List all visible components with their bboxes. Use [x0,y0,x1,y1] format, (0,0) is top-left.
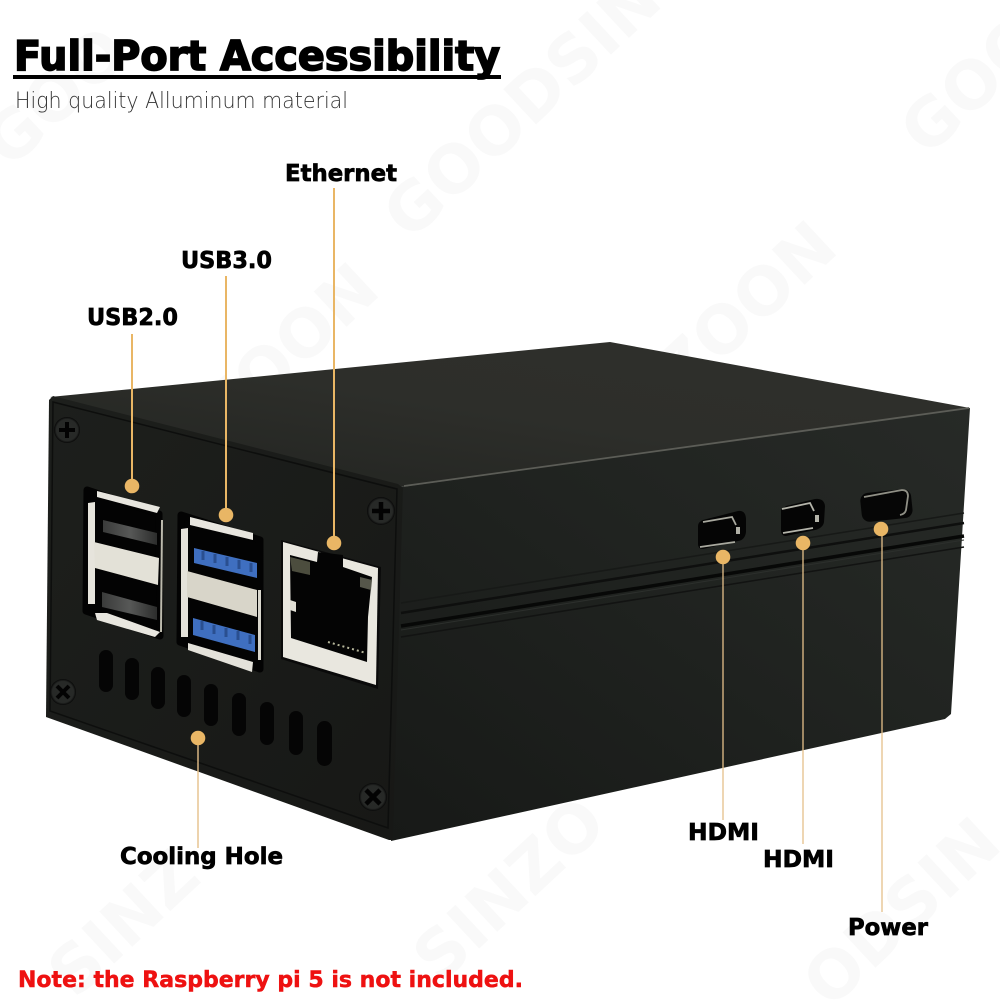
watermark: ZOON [183,249,393,452]
label: Ethernet: Ethernet [285,161,397,187]
port: USB2.0 [86,490,163,637]
port: USB-C power [860,488,913,523]
watermark: ZOON [641,207,851,410]
callout lines [132,188,882,912]
cooling holes [99,650,332,766]
callout dots [125,479,888,745]
label: USB3.0: USB3.0 [181,248,272,274]
product: aluminium case [46,342,970,841]
screw: bottom right [359,783,387,811]
watermark: SINZO [398,783,620,997]
label: Cooling Hole: Cooling Hole [120,844,283,870]
port: micro HDMI 1 [698,511,746,549]
label: HDMI left: HDMI [688,820,759,846]
case top face [50,342,970,487]
screw: top left [54,417,80,443]
note: Note: the Raspberry pi 5 is not included. [18,967,523,993]
case side face [391,408,970,841]
case front face [46,396,403,840]
label: USB2.0: USB2.0 [87,305,178,331]
port: micro HDMI 2 [781,499,825,536]
screw: top right [367,497,395,525]
label: HDMI right: HDMI [763,847,834,873]
port: USB3.0 [180,515,261,672]
subtitle: High quality Alluminum material [15,89,348,114]
label: Power: Power [848,915,929,941]
title: Full-Port Accessibility [14,32,500,80]
port: Ethernet [281,540,381,689]
screw: bottom left [50,679,76,705]
